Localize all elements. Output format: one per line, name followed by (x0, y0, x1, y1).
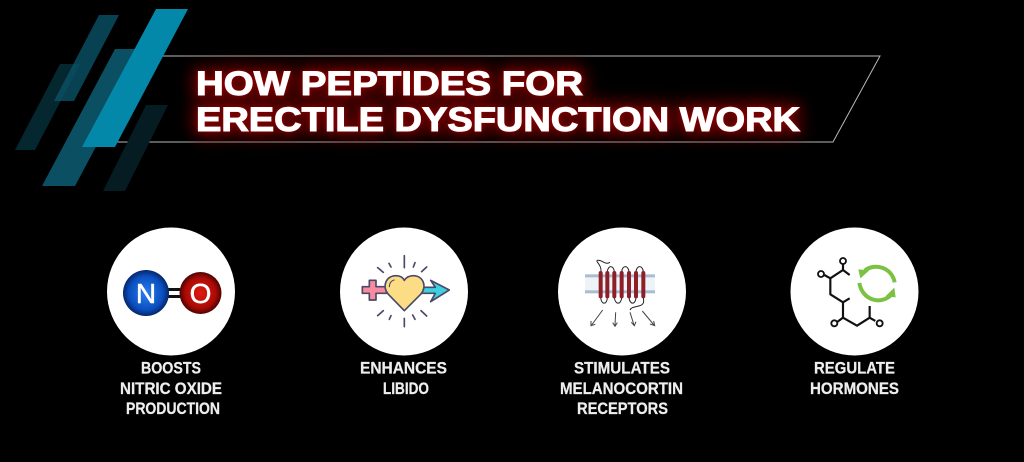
label: REGULATE (814, 360, 895, 378)
icon: heart with arrow (362, 256, 449, 327)
icon: NO molecule: O (190, 278, 211, 309)
label: NITRIC OXIDE (120, 380, 222, 398)
panel: nitric oxide (107, 228, 235, 418)
label: LIBIDO (383, 380, 429, 398)
panel: melanocortin receptors (558, 228, 686, 418)
label (810, 360, 899, 398)
label: ENHANCES (360, 360, 447, 378)
panel: hormones (790, 228, 918, 398)
label (120, 360, 222, 418)
circle background (107, 228, 235, 356)
circle background (790, 228, 918, 356)
decorative slanted bars (15, 9, 188, 191)
label (360, 360, 447, 398)
title: ERECTILE DYSFUNCTION WORK (196, 101, 800, 139)
label: HORMONES (810, 380, 899, 398)
label: BOOSTS (141, 360, 201, 378)
circle background (558, 228, 686, 356)
label (560, 360, 683, 418)
title (196, 65, 800, 139)
title frame (116, 56, 880, 142)
circle background (340, 228, 468, 356)
icon: membrane receptor (585, 260, 655, 326)
label: MELANOCORTIN (560, 380, 683, 398)
label: PRODUCTION (126, 400, 220, 418)
icon: NO molecule: N (136, 278, 156, 309)
icon: NO molecule (123, 270, 222, 316)
title: HOW PEPTIDES FOR (196, 65, 583, 103)
panel: libido (340, 228, 468, 398)
label: STIMULATES (574, 360, 670, 378)
label: RECEPTORS (577, 400, 668, 418)
icon: molecule with cycle arrows (818, 258, 896, 326)
